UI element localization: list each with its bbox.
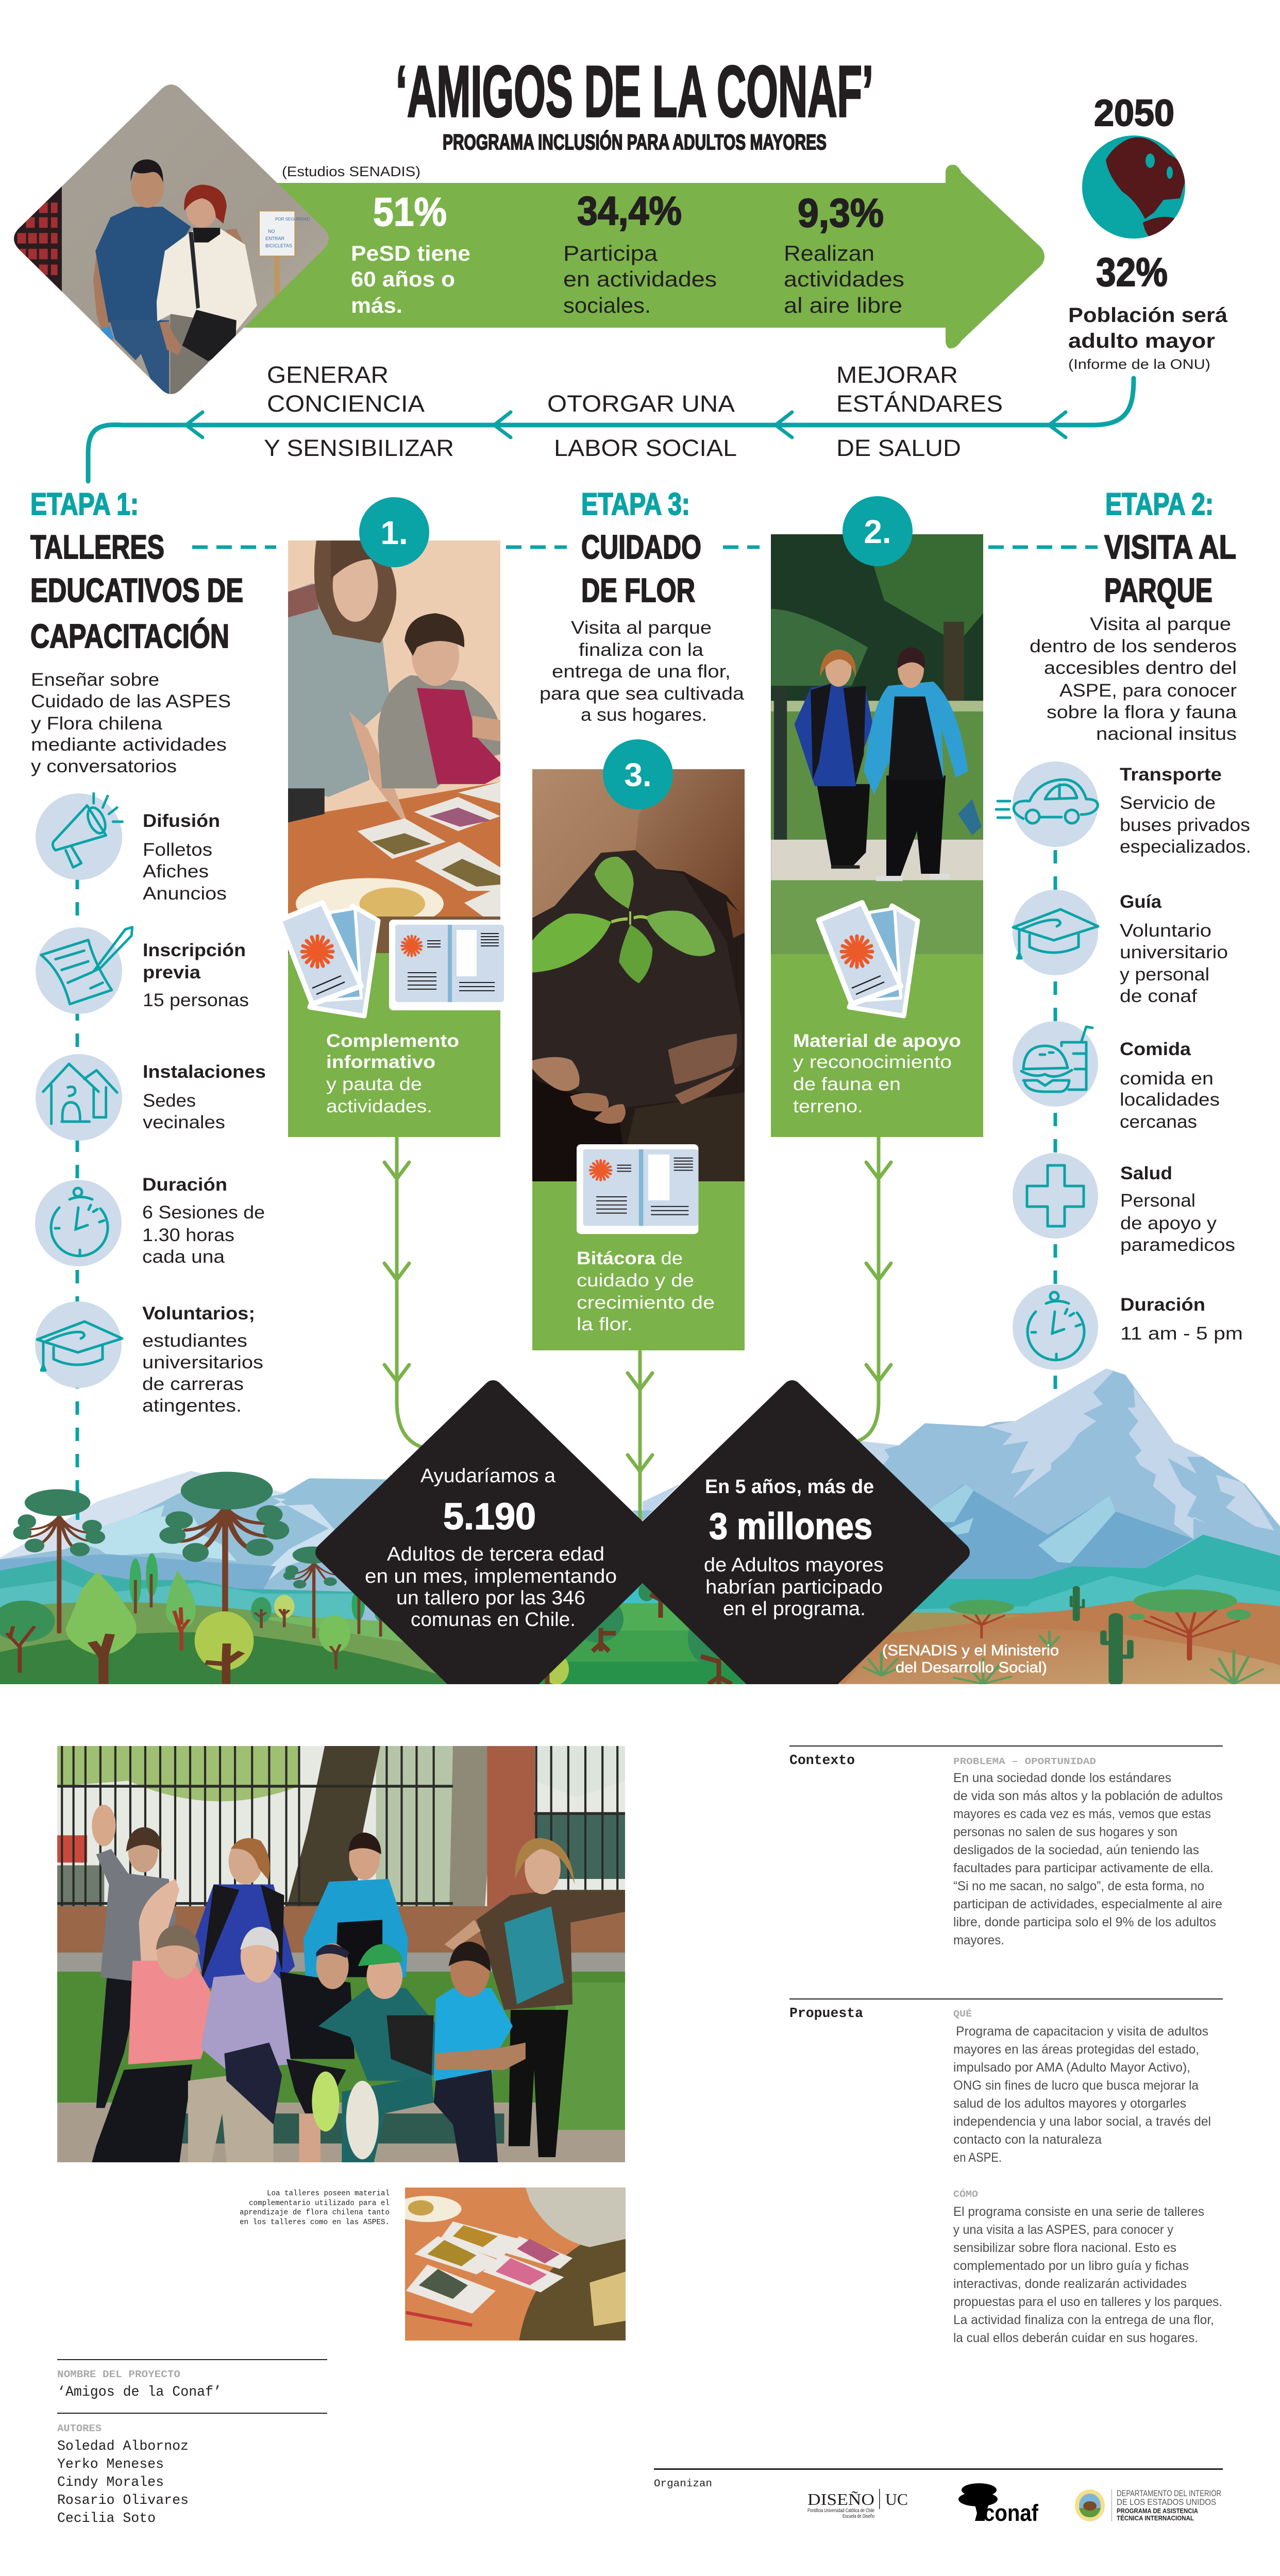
heading: talleres educativos (30, 528, 243, 655)
circle number 2 (843, 496, 913, 566)
text: que body: ONG sin fines de lucro que busca mejorar la (953, 2078, 1199, 2093)
panel: column 2 (771, 496, 983, 1137)
item: transporte: buses privados (1120, 815, 1250, 835)
text: como body: La actividad finaliza con la entrega de una flor, (953, 2313, 1214, 2327)
logo: interior department (1075, 2488, 1221, 2522)
item: difusion: Anuncios (143, 884, 227, 904)
source note: senadis (882, 1642, 1059, 1676)
text: contexto body: de vida son más altos y la población de adultos (953, 1789, 1223, 1803)
item: transporte: Transporte (1120, 765, 1222, 785)
item: voluntarios: atingentes. (142, 1396, 242, 1416)
item: instalaciones (36, 1054, 266, 1141)
item: duracion: Duración (142, 1175, 227, 1195)
green flow arrows (384, 1137, 891, 1521)
statistic: 32%: 32% (1096, 249, 1168, 295)
statistic: 51% (351, 189, 470, 317)
panel: propuesta (789, 1998, 1223, 2345)
cacti (1071, 1588, 1130, 1681)
panel: etapa 3 (532, 487, 745, 1350)
text: bitacora: cuidado y de (577, 1270, 694, 1291)
goal: mejorar salud (836, 362, 1003, 461)
heading: etapa 3: ETAPA 3: (581, 487, 690, 521)
icon: globe (1082, 135, 1186, 242)
circle number 2: 2. (864, 513, 891, 550)
text: que body (953, 2024, 1211, 2165)
sign text: POR SEGURIDAD (275, 217, 310, 222)
diamond: 3 millones: 3 millones (709, 1506, 872, 1547)
text: como body: complementado por un libro guía y fichas (953, 2259, 1189, 2273)
panel: contexto: PROBLEMA – OPORTUNIDAD (953, 1757, 1096, 1767)
panel: etapa 1 (30, 487, 266, 1416)
goal: otorgar labor social: OTORGAR UNA (547, 391, 735, 417)
panel: authors: Soledad Albornoz (57, 2439, 189, 2454)
caption: aprendizaje de flora chilena tanto (240, 2208, 390, 2217)
item: instalaciones: Instalaciones (143, 1062, 266, 1082)
dashed connectors (192, 545, 1098, 549)
logo: interior department: PROGRAMA DE ASISTENCIA (1117, 2507, 1199, 2515)
panel: authors: Rosario Olivares (57, 2493, 189, 2509)
text: description etapa 3: a sus hogares. (581, 705, 707, 725)
text: material de apoyo: Material de apoyo (793, 1031, 961, 1051)
item: inscripcion: previa (143, 962, 201, 982)
sign text (265, 217, 310, 248)
sign text: ENTRAR (265, 236, 285, 241)
text: bitacora: crecimiento de (577, 1293, 715, 1313)
panel: project name: NOMBRE DEL PROYECTO (57, 2369, 180, 2380)
text: contexto body: mayores. (953, 1933, 1004, 1947)
text: population: adulto mayor (1068, 330, 1215, 352)
heading: talleres educativos: EDUCATIVOS DE (30, 571, 243, 609)
panel: column 1 (279, 497, 504, 1137)
text: description etapa 1: y conversatorios (31, 756, 177, 776)
text: que body: independencia y una labor social, a través del (953, 2114, 1211, 2129)
item: salud: Personal (1120, 1191, 1195, 1211)
araucaria branches (28, 1508, 335, 1637)
item: duracion 2: 11 am - 5 pm (1120, 1324, 1243, 1344)
circle number 3 (603, 739, 673, 809)
text: description etapa 3: entrega de una flor, (552, 662, 731, 682)
text: description etapa 1: y Flora chilena (31, 714, 163, 734)
panel: authors: Cindy Morales (57, 2475, 164, 2490)
statistic: 9,3%: Realizan (784, 241, 874, 265)
text: que body: salud de los adultos mayores y otorgarles (953, 2096, 1186, 2111)
landscape illustration (0, 1368, 1280, 1685)
acacias (964, 1606, 1239, 1659)
item: salud (1013, 1153, 1235, 1255)
panel: propuesta: Propuesta (789, 2006, 863, 2022)
text: complemento informativo: y pauta de (326, 1074, 422, 1094)
circle number 3: 3. (624, 756, 652, 793)
heading: talleres educativos: CAPACITACIÓN (30, 617, 229, 655)
logo: interior department: DE LOS ESTADOS UNIDOS (1117, 2497, 1216, 2507)
araucaria canopies (13, 1472, 337, 1588)
text: como body: sensibilizar sobre flora nacional. Esto es (953, 2241, 1176, 2255)
diamond: 5.190 adults: Ayudaríamos a (420, 1465, 556, 1487)
goal: otorgar labor social: LABOR SOCIAL (554, 435, 737, 461)
item: duracion: 6 Sesiones de (142, 1202, 265, 1223)
text: material de apoyo: de fauna en (793, 1074, 901, 1094)
diamond: 3 millones (624, 1389, 961, 1716)
panel: authors: AUTORES (57, 2423, 102, 2434)
text: description etapa 2: dentro de los senderos (1030, 636, 1237, 656)
panel: organizers: Organizan (654, 2478, 712, 2490)
photo: man and woman in diamond (14, 84, 329, 394)
text: description etapa 1 (31, 670, 231, 776)
photo: seedling in soil (532, 768, 745, 1185)
text: description etapa 2 (1030, 614, 1237, 744)
panel: propuesta: QUÉ (953, 2008, 972, 2020)
panel: contexto (789, 1745, 1223, 1947)
goal: generar conciencia: GENERAR (267, 362, 389, 388)
goal: generar conciencia (264, 362, 454, 461)
item: duracion (35, 1175, 265, 1267)
goal: otorgar labor social (547, 391, 737, 461)
photo: group in park (57, 1746, 625, 2163)
panel: authors (57, 2413, 327, 2527)
title: ‘AMIGOS DE LA CONAF’ (396, 50, 873, 132)
diamond: 3 millones: de Adultos mayores (704, 1554, 884, 1576)
diamond: 5.190 adults: Adultos de tercera edad (387, 1544, 604, 1565)
item: difusion: Afiches (143, 861, 209, 882)
text: population: Población será (1068, 304, 1228, 327)
panel: organizers (654, 2468, 1223, 2526)
heading: visita al parque: PARQUE (1104, 571, 1212, 609)
statistic: 34,4%: 34,4% (577, 188, 682, 233)
item: inscripcion: 15 personas (143, 990, 249, 1010)
heading: cuidado de flor: CUIDADO (581, 528, 701, 566)
item: inscripcion: Inscripción (143, 940, 246, 960)
text: contexto body: participan de actividades, especialmente al aire (953, 1897, 1222, 1911)
text: bitacora (577, 1248, 715, 1334)
text: complemento informativo: actividades. (326, 1096, 432, 1116)
text: como body: El programa consiste en una serie de talleres (953, 2205, 1204, 2219)
item: inscripcion (36, 927, 249, 1014)
photo: women walking in park (771, 534, 983, 955)
item: transporte: Servicio de (1120, 793, 1216, 813)
diamond: 5.190 adults: en un mes, implementando (365, 1566, 617, 1587)
photo: workshop (288, 540, 500, 955)
item: guia: de conaf (1120, 986, 1197, 1006)
text: description etapa 2: Visita al parque (1090, 614, 1231, 634)
text: description etapa 2: nacional insitus (1096, 724, 1237, 744)
panel: etapa 2 (996, 487, 1251, 1370)
text: description etapa 1: Enseñar sobre (31, 670, 159, 690)
goal: mejorar salud: MEJORAR (836, 362, 958, 388)
item: difusion: Folletos (143, 840, 212, 860)
icon: cards 2 (819, 903, 918, 1016)
logo: diseno uc: Pontificia Universidad Católica de Chile (807, 2508, 874, 2514)
text: description etapa 3: Visita al parque (571, 618, 712, 638)
text: como body: interactivas, donde realizarán actividades (953, 2277, 1187, 2291)
logo: conaf (958, 2483, 1039, 2526)
item: transporte (996, 761, 1251, 857)
goal: generar conciencia: Y SENSIBILIZAR (264, 435, 454, 461)
item: guia (1013, 890, 1228, 1006)
panel: impact diamonds (325, 1389, 961, 1716)
text: material de apoyo (793, 1031, 961, 1116)
goal: mejorar salud: DE SALUD (836, 435, 961, 461)
item: voluntarios: universitarios (142, 1352, 263, 1372)
statistic: 51%: más. (351, 293, 402, 317)
logo: interior department: DEPARTAMENTO DEL INTERIOR (1117, 2488, 1221, 2498)
text: complemento informativo (326, 1031, 459, 1116)
circle number 1: 1. (380, 514, 408, 551)
panel: green arrow with statistics (227, 165, 1045, 348)
statistic: 9,3%: al aire libre (784, 293, 902, 317)
logo: diseno uc: UC (885, 2490, 908, 2509)
green caption box 1 (288, 953, 500, 1137)
text: contexto body: desligados de la sociedad, aún teniendo las (953, 1843, 1199, 1857)
text: contexto body (953, 1771, 1223, 1947)
source note: senadis: (SENADIS y el Ministerio (882, 1642, 1059, 1659)
statistic: 9,3%: actividades (784, 267, 904, 291)
item: salud: paramedicos (1120, 1235, 1235, 1255)
text: description etapa 1: mediante actividades (31, 735, 227, 755)
green caption box 2 (771, 954, 983, 1137)
heading: cuidado de flor: DE FLOR (581, 571, 695, 609)
photo: cards on table (393, 2188, 626, 2341)
text: que body: mayores en las áreas protegidas del estado, (953, 2042, 1199, 2057)
text: como body: la cual ellos deberán cuidar en sus hogares. (953, 2331, 1198, 2345)
text: que body: contacto con la naturaleza (953, 2132, 1102, 2147)
subtitle: PROGRAMA INCLUSIÓN PARA ADULTOS MAYORES (443, 129, 827, 154)
text: complemento informativo: Complemento (326, 1031, 459, 1051)
heading: etapa 1: ETAPA 1: (30, 487, 139, 521)
statistic: 34,4%: Participa (563, 241, 658, 265)
logo: interior department: TÉCNICA INTERNACIONAL (1117, 2514, 1194, 2522)
item: transporte: especializados. (1120, 837, 1251, 857)
diamond: 3 millones: En 5 años, más de (705, 1476, 874, 1498)
text: description etapa 1: Cuidado de las ASPES (31, 691, 231, 711)
item: difusion: Difusión (143, 811, 220, 831)
panel: authors: Yerko Meneses (57, 2457, 164, 2472)
panel: project name (57, 2359, 327, 2400)
item: duracion: 1.30 horas (142, 1225, 234, 1245)
goal: generar conciencia: CONCIENCIA (267, 391, 425, 417)
text: material de apoyo: y reconocimiento (793, 1052, 952, 1072)
statistic: 51%: 51% (373, 189, 447, 234)
item: comida: localidades (1120, 1090, 1220, 1110)
left scene (0, 1471, 447, 1684)
diamond: 3 millones: en el programa. (723, 1598, 866, 1620)
text: bitacora: la flor. (577, 1314, 633, 1334)
circle number 1 (359, 497, 429, 567)
statistic: 51%: 60 años o (351, 267, 455, 291)
text: complemento informativo: informativo (326, 1052, 435, 1072)
caption: complementario utilizado para el (249, 2199, 390, 2208)
text: population: (Informe de la ONU) (1068, 357, 1210, 372)
heading: etapa 2: ETAPA 2: (1105, 487, 1214, 521)
statistic: 9,3% (784, 190, 904, 317)
center scene between diamonds (536, 1484, 750, 1685)
text: contexto body: libre, donde participa solo el 9% de los adultos (953, 1915, 1216, 1929)
right scene (838, 1368, 1280, 1684)
item: instalaciones: vecinales (143, 1112, 225, 1132)
text: contexto body: En una sociedad donde los estándares (953, 1771, 1171, 1785)
item: voluntarios: estudiantes (142, 1331, 247, 1351)
logo: diseno uc: DISEÑO (807, 2490, 874, 2509)
text: contexto body: personas no salen de sus hogares y son (953, 1825, 1177, 1839)
item: voluntarios: Voluntarios; (142, 1303, 255, 1324)
logo: diseno uc (807, 2489, 908, 2519)
item: guia: Guía (1120, 892, 1162, 912)
text: bitacora: Bitácora de (577, 1248, 683, 1268)
text: population (1068, 304, 1228, 372)
caption: en los talleres como en las ASPES. (240, 2218, 390, 2227)
heading: talleres educativos: TALLERES (30, 528, 164, 566)
text: contexto body: mayores es cada vez es más, vemos que estas (953, 1807, 1211, 1821)
item: comida: comida en (1120, 1069, 1214, 1089)
text: que body: en ASPE. (953, 2150, 1002, 2165)
text: description etapa 3: finaliza con la (579, 640, 704, 660)
item: salud: Salud (1120, 1163, 1172, 1183)
item: comida: Comida (1120, 1039, 1191, 1059)
statistic: 9,3%: 9,3% (798, 190, 884, 235)
diamond: 5.190 adults (325, 1389, 661, 1716)
item: guia: universitario (1120, 942, 1228, 962)
logo: diseno uc: Escuela de Diseño (843, 2514, 874, 2519)
agaves (864, 1632, 1263, 1684)
text: contexto body: facultades para participar activamente de ella. (953, 1861, 1214, 1875)
text: como body (953, 2205, 1222, 2345)
item: guia: Voluntario (1120, 921, 1211, 941)
panel: project name: ‘Amigos de la Conaf’ (57, 2384, 222, 2400)
panel: contexto: Contexto (789, 1753, 855, 1769)
source note: (Estudios SENADIS) (282, 164, 420, 179)
teal flow arrow (88, 378, 1134, 481)
caption (240, 2189, 390, 2227)
text: description etapa 3 (540, 618, 745, 725)
panel: propuesta: CÓMO (953, 2189, 978, 2200)
icon: book (389, 920, 504, 1010)
text: contexto body: “Si no me sacan, no salgo”, de esta forma, no (953, 1879, 1204, 1893)
item: salud: de apoyo y (1120, 1213, 1217, 1233)
text: como body: propuestas para el uso en talleres y los parques. (953, 2295, 1222, 2309)
text: description etapa 2: accesibles dentro del (1044, 658, 1237, 678)
broadleaf trees (0, 1553, 385, 1684)
item: comida: cercanas (1120, 1112, 1197, 1132)
goal: mejorar salud: ESTÁNDARES (836, 391, 1003, 417)
item: instalaciones: Sedes (143, 1091, 196, 1111)
year 2050: 2050 (1094, 93, 1174, 134)
text: material de apoyo: terreno. (793, 1096, 863, 1116)
statistic: 34,4%: sociales. (563, 293, 651, 317)
green caption box 3 (532, 1181, 745, 1350)
item: voluntarios (35, 1301, 263, 1416)
source note: senadis: del Desarrollo Social) (896, 1659, 1047, 1676)
icon: book 3 (577, 1144, 698, 1234)
item: difusion (36, 793, 227, 904)
item: guia: y personal (1120, 964, 1209, 985)
text: como body: y una visita a las ASPES, para conocer y (953, 2223, 1173, 2237)
statistic: 51%: PeSD tiene (351, 241, 470, 265)
icon: cards (279, 903, 378, 1016)
text: description etapa 2: sobre la flora y fauna (1047, 702, 1237, 722)
text: que body: Programa de capacitacion y visita de adultos (956, 2024, 1208, 2039)
heading: visita al parque (1104, 528, 1236, 609)
text: description etapa 3: para que sea cultivada (540, 684, 745, 704)
diamond: 5.190 adults: comunas en Chile. (411, 1609, 576, 1631)
item: duracion 2: Duración (1120, 1295, 1205, 1315)
sign text: BICICLETAS (265, 243, 292, 248)
text: description etapa 2: ASPE, para conocer (1059, 681, 1237, 701)
panel: authors: Cecilia Soto (57, 2511, 156, 2527)
logo: conaf: conaf (983, 2500, 1039, 2526)
diamond: 5.190 adults: un tallero por las 346 (396, 1587, 585, 1609)
diamond: 5.190 adults: 5.190 (443, 1496, 536, 1537)
caption: Loa talleres poseen material (267, 2189, 390, 2198)
item: voluntarios: de carreras (142, 1374, 244, 1394)
diamond: 3 millones: habrían participado (705, 1577, 883, 1598)
sign text: NO (268, 229, 275, 234)
item: duracion 2 (1013, 1284, 1243, 1370)
statistic: 34,4%: en actividades (563, 267, 717, 291)
text: que body: impulsado por AMA (Adulto Mayor Activo), (953, 2060, 1190, 2075)
heading: visita al parque: VISITA AL (1104, 528, 1236, 566)
heading: cuidado de flor (581, 528, 701, 609)
statistic: 34,4% (563, 188, 717, 317)
item: duracion: cada una (142, 1247, 225, 1267)
item: comida (1013, 1021, 1220, 1132)
